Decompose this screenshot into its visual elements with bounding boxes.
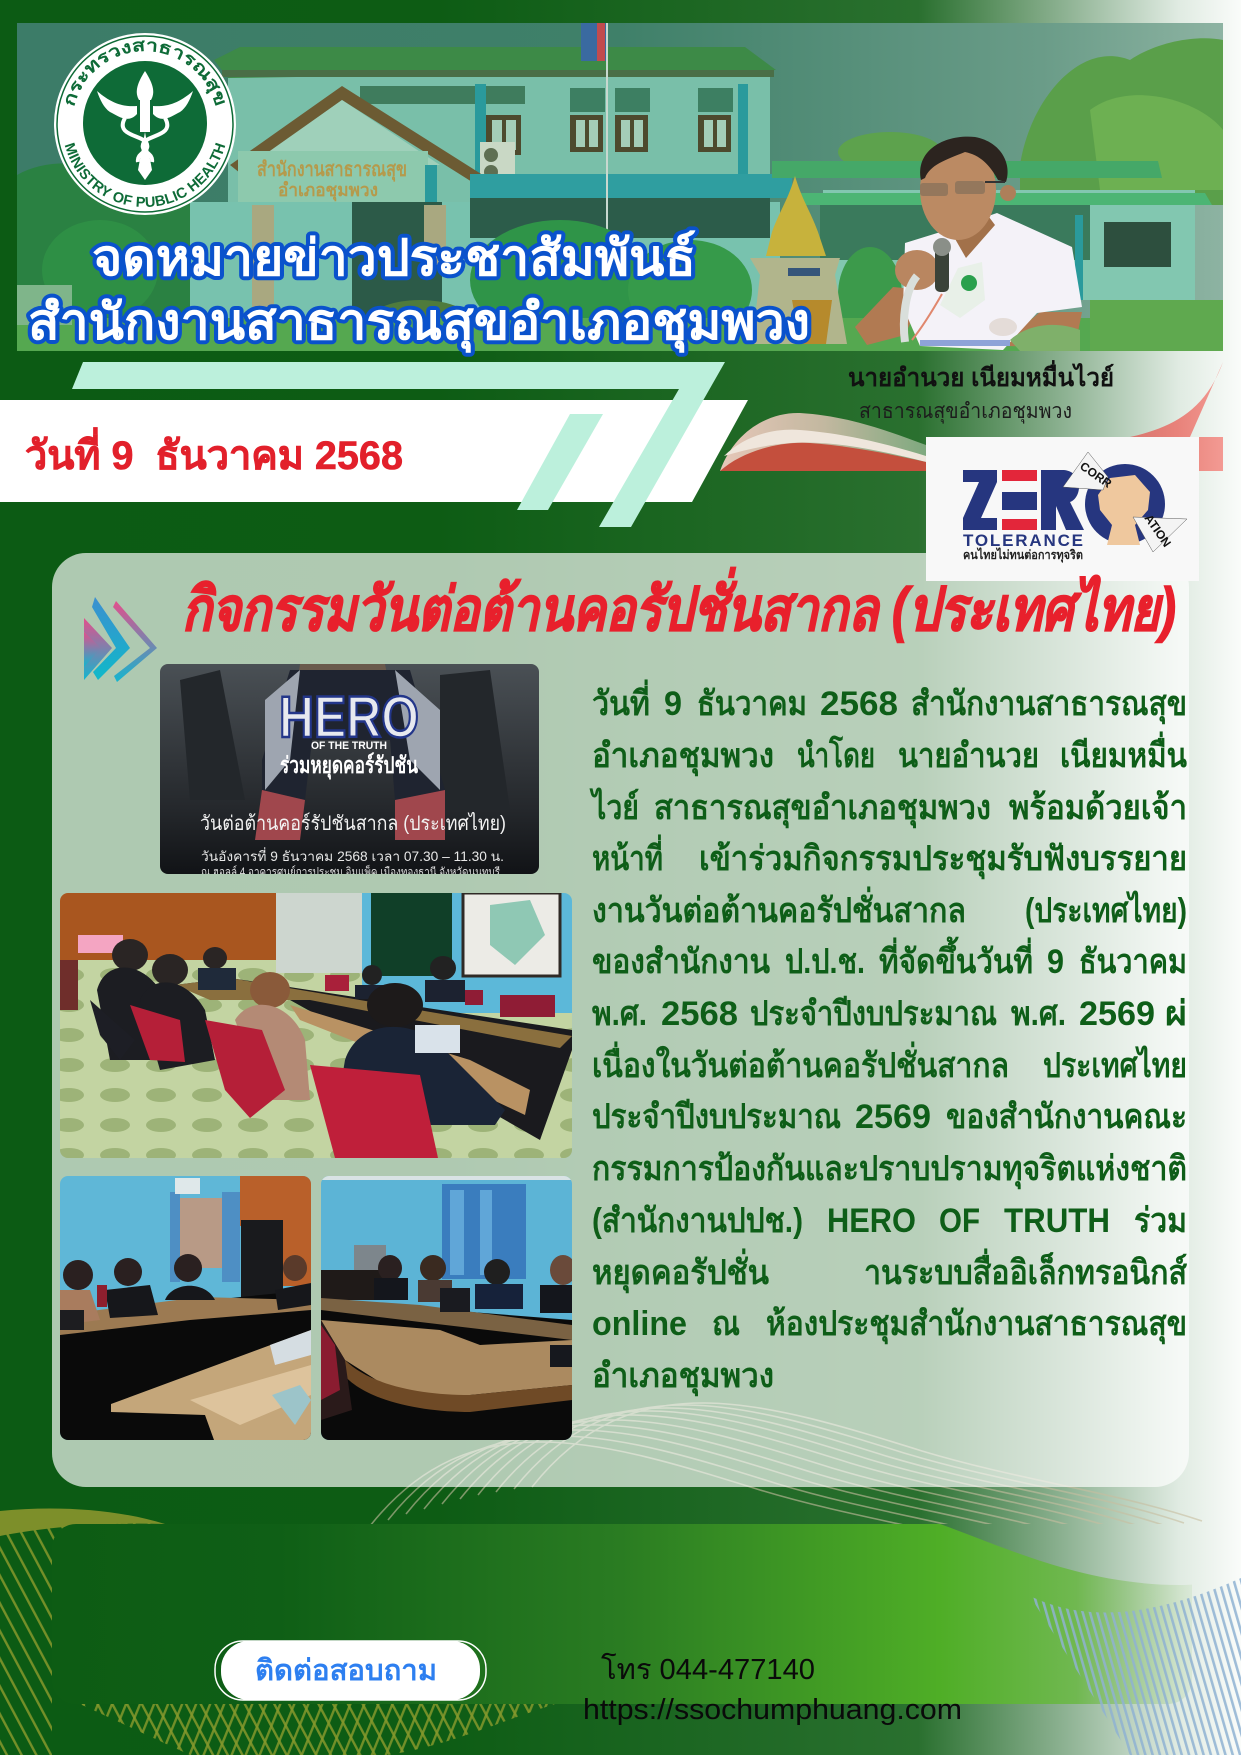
body text: ร่วม (1134, 1202, 1187, 1240)
body text: ประจำปีงบประมาณ (750, 995, 997, 1033)
phone number: โทร 044-477140 (601, 1652, 815, 1686)
icon: ministry of public health logo (54, 33, 236, 215)
white wave and blue lines, lower right (940, 1524, 1241, 1755)
teal canopy (470, 174, 792, 198)
contact button: ติดต่อสอบถาม (255, 1655, 437, 1687)
letter O (1085, 464, 1165, 544)
sign board (238, 151, 428, 202)
lower floor (190, 202, 780, 318)
panel: bottom contact band (52, 1524, 1192, 1704)
director name and role (848, 360, 1114, 424)
letter E striped (1002, 470, 1037, 530)
photo: hero of the truth poster: วันต่อต้านคอร์รัปชันสากล (ประเทศไทย) (200, 812, 506, 835)
body text: HERO (827, 1202, 916, 1240)
zero tolerance logo: ATION (1142, 512, 1174, 550)
table (175, 978, 572, 1140)
body text: ผ่ (1165, 995, 1187, 1033)
zero tolerance logo: CORR (1077, 459, 1115, 491)
body text: ไวย์ (589, 787, 639, 827)
fist (1098, 475, 1150, 545)
flag and pole (581, 23, 607, 61)
lawn (17, 318, 1090, 351)
zero tolerance logo: คนไทยไม่ทนต่อการทุจริต (963, 547, 1083, 563)
title: press release heading (28, 230, 810, 353)
body text: online (592, 1305, 687, 1343)
body text: งานวันต่อต้านคอรัปชั่นสากล (592, 886, 966, 930)
body text: ณ (712, 1305, 740, 1343)
body text: (ประเทศไทย) (1025, 890, 1187, 930)
body text: พ.ศ. (592, 995, 647, 1033)
panel: main content card (52, 553, 1189, 1487)
body text: 2568 (820, 685, 898, 723)
zero tolerance logo: TOLERANCE (963, 531, 1083, 550)
body text: 2569 (855, 1098, 931, 1136)
body text: นำโดย (797, 735, 875, 775)
upper windows strip (360, 86, 525, 104)
middle windows (486, 115, 521, 155)
photo: hero of the truth poster: ณ ฮอลล์ 4 อาคารศูนย์การประชุม อิมแพ็ค เมืองทองธานี จังหวัดนนทบุรี (201, 864, 500, 880)
body text: ธันวาคม (1079, 943, 1187, 981)
body text: อำเภอชุมพวง (592, 1357, 774, 1397)
body text: ธันวาคม (697, 685, 807, 723)
date text: วันที่ 9 ธันวาคม 2568 (25, 427, 403, 478)
body text: 9 (664, 685, 682, 723)
body text: ที่จัดขึ้นวันที่ (879, 936, 1033, 981)
main building wall (228, 77, 770, 202)
body text (589, 679, 1187, 1397)
body text: พร้อมด้วยเจ้า (1009, 789, 1187, 827)
body text: ป.ป.ช. (785, 943, 865, 981)
header photo: office building and director (17, 23, 1223, 351)
gable roof (230, 86, 481, 181)
teal pillars (475, 84, 486, 179)
body text: เข้าร่วมกิจกรรมประชุมรับฟังบรรยาย (699, 840, 1187, 880)
photo: hero of the truth poster: HERO (279, 685, 419, 750)
man: arm and hand (855, 287, 910, 345)
body text: 2568 (661, 995, 738, 1033)
body text: สำนักงานสาธารณสุข (911, 685, 1187, 725)
body text: 2569 (1079, 995, 1155, 1033)
roof (214, 47, 776, 78)
body text: หยุดคอรัปชั่น (592, 1248, 769, 1294)
icon: chevron arrows (84, 597, 157, 682)
contact button (215, 1641, 486, 1700)
buddha statue (766, 176, 826, 256)
body text: นายอำนวย (898, 737, 1039, 775)
photo: hero of the truth poster: วันอังคารที่ 9 ธันวาคม 2568 เวลา 07.30 – 11.30 น. (201, 847, 504, 864)
header photo: office building and director: อำเภอชุมพวง (278, 180, 378, 202)
body text: หน้าที่ (592, 834, 663, 878)
title: press release heading: จดหมายข่าวประชาสัมพันธ์ (92, 230, 696, 286)
red chairs (90, 1000, 107, 1044)
wave crest lines behind panel (370, 1403, 1202, 1560)
body text: 9 (1047, 943, 1064, 981)
body text: วันที่ (592, 679, 650, 723)
letter R (1041, 470, 1084, 530)
white date banner (0, 400, 748, 502)
body text: านระบบสื่ออิเล็กทรอนิกส์ (864, 1248, 1187, 1292)
man: head (920, 152, 996, 240)
body text: พ.ศ. (1011, 995, 1066, 1033)
background trees left (17, 164, 193, 318)
bushes (42, 220, 158, 320)
icon: ministry of public health logo: MINISTRY OF PUBLIC HEALTH (64, 142, 226, 207)
body text: สาธารณสุขอำเภอชุมพวง (654, 789, 991, 829)
body text: อำเภอชุมพวง (592, 737, 774, 777)
people (63, 1260, 93, 1290)
mask (940, 262, 985, 318)
body text: (สำนักงานปปช.) (592, 1202, 803, 1240)
mint seven stripe shape (72, 362, 725, 527)
body text: ประจำปีงบประมาณ (592, 1098, 841, 1136)
photo: meeting room left view (60, 1176, 311, 1440)
director name and role: นายอำนวย เนียมหมื่นไวย์ (848, 360, 1114, 392)
body text: TRUTH (1004, 1202, 1110, 1240)
desks (321, 1300, 572, 1440)
photo: meeting room wide view (60, 893, 572, 1158)
director name and role: สาธารณสุขอำเภอชุมพวง (859, 400, 1072, 424)
body text: ของสำนักงานคณะ (946, 1098, 1187, 1136)
header photo: office building and director: สำนักงานสาธารณสุข (257, 159, 407, 182)
shirt logo (989, 318, 1017, 336)
zero tolerance logo (926, 437, 1199, 581)
icon: ministry of public health logo: กระทรวงสาธารณสุข (66, 40, 225, 106)
caduceus emblem (97, 71, 193, 180)
body text: ประเทศไทย (1043, 1045, 1187, 1085)
body text: ห้องประชุมสำนักงานสาธารณสุข (766, 1305, 1187, 1345)
website url: https://ssochumphuang.com (583, 1694, 962, 1726)
hand and microphone (895, 250, 939, 290)
title: press release heading: สำนักงานสาธารณสุขอำเภอชุมพวง (28, 294, 810, 353)
man: glasses (920, 183, 948, 196)
decorative wave lines, bottom (0, 1509, 555, 1755)
body text: ของสำนักงาน (592, 943, 770, 981)
trees right (838, 132, 938, 161)
body text: เนียมหมื่น (1060, 731, 1187, 775)
decorative red and white wave (720, 362, 1223, 471)
photo: hero of the truth poster: OF THE TRUTH (311, 740, 387, 752)
desks (60, 1290, 311, 1440)
body text: เนื่องในวันต่อต้านคอรัปชั่นสากล (592, 1041, 1009, 1085)
torn paper corruption (1063, 452, 1108, 490)
people (378, 1255, 402, 1281)
body text: OF (939, 1202, 980, 1240)
photo: hero of the truth poster (160, 664, 539, 880)
letter Z (963, 470, 997, 530)
photo: hero of the truth poster: ร่วมหยุดคอร์รัปชัน (280, 752, 418, 780)
side green building (823, 190, 1195, 300)
photo: meeting room right view (321, 1176, 576, 1440)
air conditioner (480, 142, 515, 177)
man: shirt (903, 213, 1082, 350)
people (112, 939, 148, 971)
